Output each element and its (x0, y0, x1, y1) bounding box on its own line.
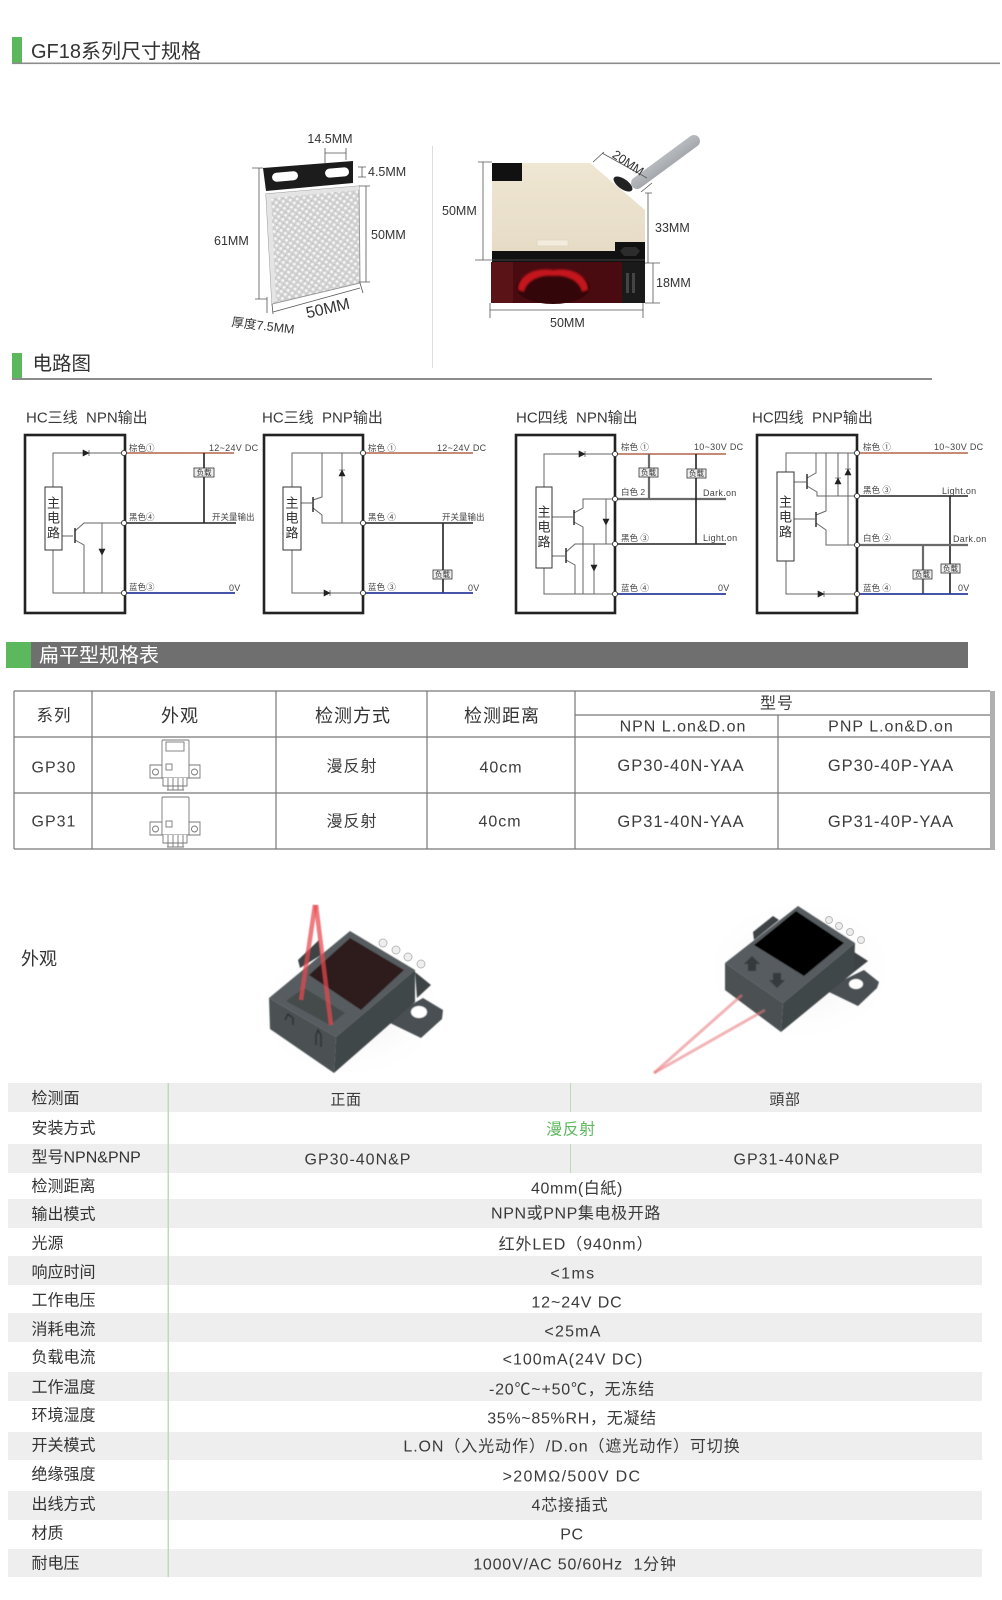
wire labels: 蓝色 ③ (368, 582, 396, 592)
row GP31: GP31 (32, 814, 76, 830)
loads: 负载 (943, 563, 958, 573)
terminal pins (826, 916, 864, 944)
main circuit block: 电 (537, 520, 551, 534)
reflector plate (266, 186, 360, 304)
reflector bracket (263, 161, 353, 191)
sensor red lens window (491, 262, 645, 304)
reflector dimension labels: 14.5MM (307, 132, 353, 146)
sensor housing (25, 435, 125, 613)
vertical divider (432, 146, 433, 368)
row values: 漫反射 (546, 1120, 596, 1138)
row values: 40mm(白紙) (531, 1180, 623, 1198)
row values: <1ms (550, 1266, 596, 1282)
load (194, 467, 214, 477)
loads (913, 563, 960, 579)
main circuit block: 电 (285, 510, 299, 526)
output wires (857, 452, 968, 454)
row values: 1000V/AC 50/60Hz 1分钟 (473, 1556, 677, 1574)
main circuit block: 主 (537, 504, 551, 520)
appearance label: 外观 (21, 949, 57, 969)
row labels: 材质 (32, 1524, 64, 1542)
reflector dimension labels: 50MM (371, 228, 406, 242)
load: 负载 (435, 569, 450, 579)
heading band: flat type specification table: 扁平型规格表 (39, 644, 159, 667)
circuit title: HC四线 PNP输出 (752, 410, 873, 426)
row labels: 环境湿度 (32, 1406, 96, 1424)
reflector dimension labels: 4.5MM (368, 165, 406, 179)
row GP30: 漫反射 (326, 758, 378, 776)
row values: -20℃~+50℃，无冻结 (489, 1380, 655, 1398)
loads (639, 467, 706, 478)
loads: 负载 (641, 467, 656, 477)
wire labels: 黑色 ③ (621, 533, 649, 543)
wire labels: 棕色 ① (368, 443, 396, 453)
output wires (124, 452, 234, 454)
row labels: 出线方式 (32, 1496, 96, 1514)
specification table (8, 1083, 982, 1577)
row values: >20MΩ/500V DC (503, 1468, 641, 1486)
row GP31: GP31-40P-YAA (828, 813, 954, 831)
loads: 负载 (915, 569, 930, 579)
reflector with dimensions (214, 132, 406, 337)
wire labels: 0V (229, 583, 241, 593)
terminals (121, 450, 127, 596)
main circuit block (536, 487, 552, 568)
internal wiring (786, 453, 857, 594)
row GP31 (32, 812, 954, 831)
product render: front sensing (250, 905, 450, 1082)
heading: circuit diagrams (12, 353, 932, 380)
internal wiring (53, 453, 124, 593)
row labels: 型号NPN&PNP (32, 1148, 141, 1166)
row values: GP31-40N&P (734, 1152, 840, 1168)
circuit title: HC三线 PNP输出 (262, 410, 383, 426)
table header: PNP L.on&D.on (828, 718, 954, 736)
wire labels: 开关量输出 (442, 512, 485, 522)
wire labels: 开关量输出 (212, 512, 255, 522)
wire labels (368, 443, 487, 593)
wire labels: 棕色① (129, 443, 155, 453)
output wires (363, 452, 473, 454)
main circuit block: 电 (779, 510, 792, 524)
heading: GF18 dimensions: GF18系列尺寸规格 (31, 40, 201, 63)
row labels: 输出模式 (32, 1206, 96, 1224)
reflector dimension lines (252, 148, 370, 314)
wire labels: 0V (958, 583, 970, 593)
striped rows (8, 1083, 982, 1577)
wire labels: 黑色④ (129, 512, 155, 522)
table header: 型号 (760, 694, 794, 712)
heading band: flat type specification table (6, 642, 968, 668)
circuit title: HC四线 NPN输出 (516, 410, 638, 426)
row labels: 绝缘强度 (32, 1466, 96, 1484)
sensor housing (516, 435, 615, 613)
row labels: 光源 (32, 1234, 64, 1252)
row labels: 消耗电流 (32, 1320, 96, 1338)
output wires (615, 453, 726, 455)
row values: 4芯接插式 (532, 1496, 608, 1514)
main circuit block: 主 (47, 496, 60, 510)
sensor dimension labels: 50MM (442, 204, 477, 218)
row values: 12~24V DC (531, 1294, 623, 1312)
wire labels: Light.on (942, 486, 976, 496)
red light beams (301, 905, 331, 1025)
model selection table (14, 691, 995, 850)
wire labels: 棕色 ① (863, 442, 891, 452)
wire labels: 白色 ② (863, 533, 891, 543)
table right edge (990, 691, 995, 850)
main circuit block (777, 472, 794, 561)
housing (725, 906, 879, 1032)
wire labels: 10~30V DC (694, 442, 744, 452)
row labels: 响应时间 (32, 1262, 96, 1282)
wire labels: 蓝色③ (129, 582, 155, 592)
wire labels: 白色 2 (621, 487, 645, 497)
main circuit block (283, 487, 301, 550)
row labels: 耐电压 (32, 1554, 80, 1572)
terminals (854, 450, 860, 597)
sensor dimension lines (475, 152, 660, 318)
circuit title: HC三线 NPN输出 (26, 410, 148, 426)
green column rules (168, 1083, 571, 1577)
sensor dimension labels: 18MM (656, 276, 691, 290)
sensor housing (264, 435, 363, 613)
row GP30: GP30 (32, 760, 76, 776)
wire labels: 12~24V DC (209, 443, 259, 453)
wire labels: Light.on (703, 533, 737, 543)
sensor dimension labels: 50MM (550, 316, 585, 330)
table header: 系列 (36, 706, 72, 725)
wire labels: 12~24V DC (437, 443, 487, 453)
row values: <100mA(24V DC) (503, 1352, 643, 1368)
row GP31: 漫反射 (326, 812, 378, 830)
circuit: HC four-wire NPN (516, 410, 744, 613)
main circuit block: 主 (285, 496, 299, 510)
transistors and diodes (807, 474, 816, 527)
row values: 正面 (330, 1092, 362, 1108)
row labels: 检测面 (32, 1090, 80, 1108)
main circuit block: 电 (47, 510, 60, 526)
wire labels (863, 442, 987, 593)
circuit: HC four-wire PNP (752, 410, 987, 613)
internal wiring (292, 453, 363, 593)
row labels: 工作电压 (32, 1292, 96, 1310)
main circuit block: 路 (47, 526, 60, 540)
wire labels: Dark.on (703, 488, 737, 498)
product render: head sensing (654, 895, 900, 1073)
heading: circuit diagrams: 电路图 (32, 353, 91, 375)
wire labels: 蓝色 ④ (621, 583, 649, 593)
wire labels (621, 442, 744, 593)
row GP30: 40cm (479, 760, 523, 776)
icon: GP31 outline (150, 797, 200, 847)
circuit: HC three-wire NPN (25, 410, 259, 613)
row values: 35%~85%RH，无凝结 (487, 1410, 657, 1428)
table header: NPN L.on&D.on (620, 718, 746, 736)
reflector dimension labels (214, 132, 406, 337)
wire labels: 0V (718, 583, 730, 593)
row values (305, 1092, 840, 1574)
transistor and diodes (312, 497, 314, 512)
main circuit block (45, 487, 62, 550)
wire labels: 黑色 ④ (368, 512, 396, 522)
loads: 负载 (689, 468, 704, 478)
table grid (14, 691, 990, 849)
row GP30 (32, 757, 954, 776)
housing (269, 931, 443, 1073)
row values: NPN或PNP集电极开路 (491, 1204, 661, 1222)
wire labels: Dark.on (953, 534, 987, 544)
icon: GP30 outline (150, 740, 200, 790)
row labels: 安装方式 (32, 1120, 96, 1138)
terminals (612, 451, 618, 597)
wire labels: 0V (468, 583, 480, 593)
reflector dimension labels: 61MM (214, 234, 249, 248)
row values: 红外LED（940nm） (499, 1236, 653, 1254)
row GP31: 40cm (478, 814, 522, 830)
main circuit block: 主 (779, 494, 792, 510)
table header: 检测距离 (464, 706, 540, 726)
sensor housing (757, 435, 857, 613)
row labels (32, 1090, 141, 1572)
main circuit block: 路 (779, 524, 792, 540)
row values: GP30-40N&P (305, 1152, 411, 1168)
row values: <25mA (544, 1324, 602, 1340)
row GP30: GP30-40P-YAA (828, 757, 954, 775)
wire labels: 蓝色 ④ (863, 583, 891, 593)
photoelectric sensor with dimensions (442, 141, 694, 330)
row values: 頭部 (769, 1092, 801, 1108)
wire labels: 棕色 ① (621, 442, 649, 452)
row values: L.ON（入光动作）/D.on（遮光动作）可切换 (403, 1438, 741, 1456)
row GP30: GP30-40N-YAA (617, 757, 745, 775)
sensor dimension labels (442, 147, 691, 330)
reflector dimension labels: 50MM (304, 296, 352, 322)
wire labels: 黑色 ③ (863, 485, 891, 495)
row labels: 工作温度 (32, 1378, 96, 1396)
internal wiring (544, 454, 615, 594)
table header: 外观 (161, 706, 199, 726)
row GP31: GP31-40N-YAA (617, 813, 745, 831)
wire labels (129, 443, 259, 593)
main circuit block: 路 (537, 534, 551, 550)
load: 负载 (196, 467, 212, 477)
circuit: HC three-wire PNP (262, 410, 487, 613)
red light beams (654, 995, 765, 1073)
row values: PC (560, 1526, 584, 1544)
reflector dimension labels: 厚度7.5MM (231, 314, 295, 337)
wire labels: 10~30V DC (934, 442, 984, 452)
table header: 检测方式 (315, 706, 391, 726)
row labels: 负载电流 (32, 1348, 96, 1366)
table header (36, 694, 954, 736)
sensor dimension labels: 33MM (655, 221, 690, 235)
sensor cable (637, 141, 694, 183)
row labels: 检测距离 (32, 1178, 96, 1196)
main circuit block: 路 (285, 526, 299, 540)
terminal pins (379, 939, 425, 968)
transistor and diodes (74, 528, 76, 543)
transistors and diodes (566, 510, 574, 563)
sensor body (492, 163, 645, 262)
sensor dimension labels: 20MM (610, 147, 646, 179)
row labels: 开关模式 (32, 1436, 96, 1454)
terminals (360, 450, 366, 596)
heading: GF18 dimensions (12, 37, 1000, 64)
